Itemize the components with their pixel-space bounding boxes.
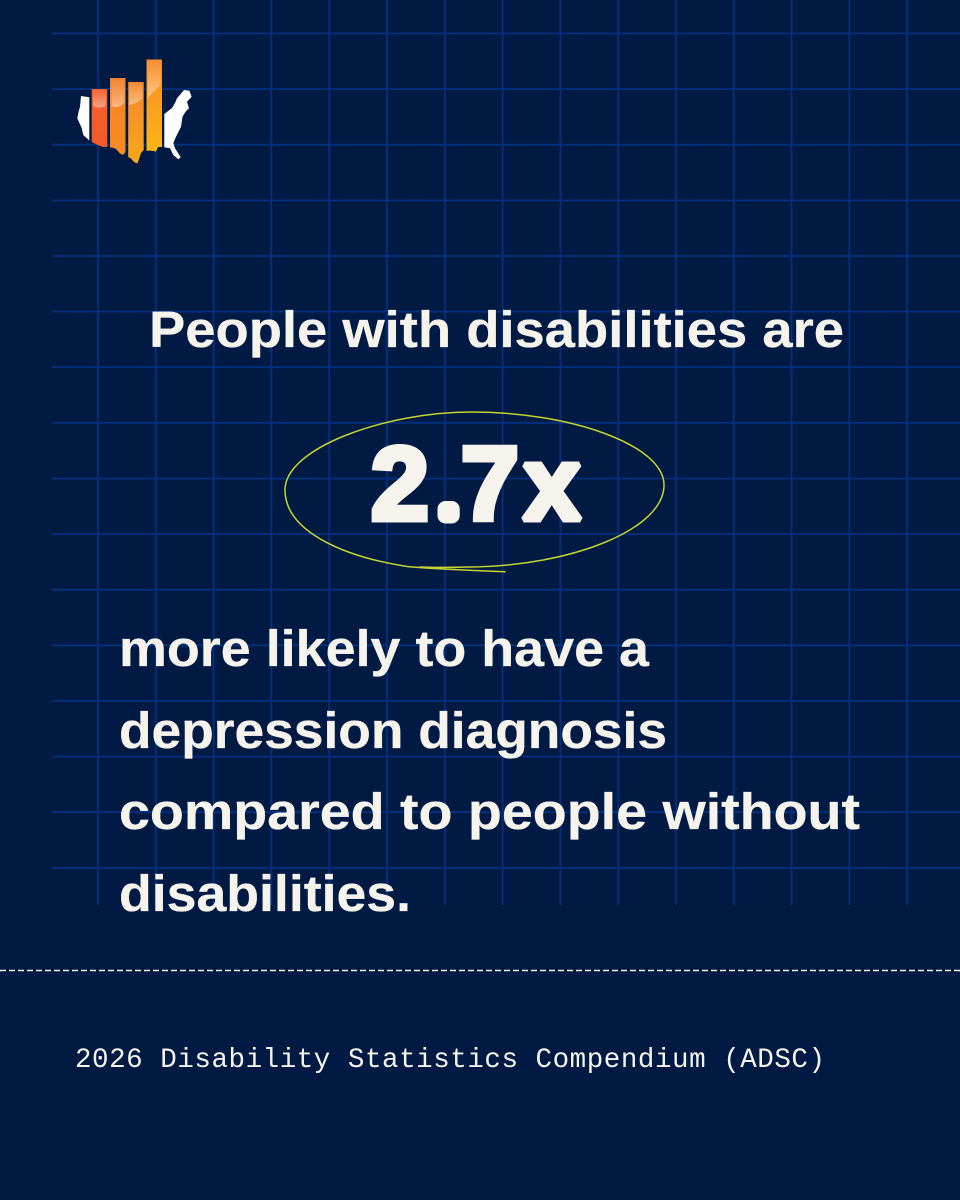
divider (0, 970, 960, 972)
map: eastern states (164, 90, 192, 159)
logo: US map with bar chart (77, 60, 192, 164)
heading: intro line: People with disabilities are (149, 301, 844, 358)
text block: description: more likely to have a (119, 620, 650, 677)
bar: red (92, 89, 107, 147)
hand-drawn ellipse (285, 412, 664, 572)
text block: description: compared to people without (119, 783, 860, 840)
source citation: 2026 Disability Statistics Compendium (ADSC) (75, 1045, 825, 1076)
callout: 2.7x statistic with hand-drawn ellipse (285, 412, 664, 572)
text block: description: depression diagnosis (119, 702, 667, 759)
text block: description (119, 620, 860, 922)
bar: orange (110, 78, 126, 155)
statistic: x (523, 426, 581, 542)
statistic: . (442, 476, 455, 526)
statistic: 2 (371, 426, 429, 542)
map: west coast (77, 96, 89, 140)
statistic: 7 (461, 426, 519, 542)
text block: description: disabilities. (119, 865, 411, 922)
bar: amber (128, 82, 144, 164)
bar: yellow (146, 60, 162, 152)
